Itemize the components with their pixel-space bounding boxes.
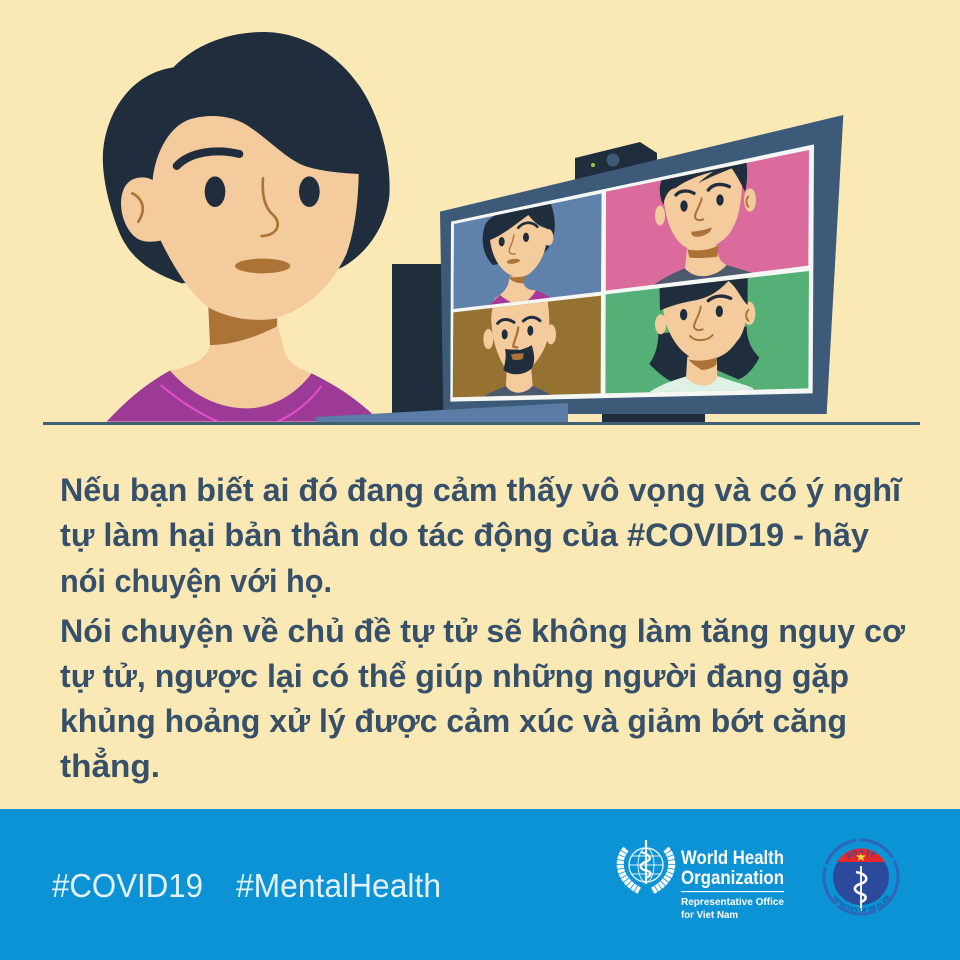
paragraph 2: [60, 613, 905, 784]
logo text: World Health Organization: World Health: [681, 848, 784, 869]
video tile: woman on green: [603, 267, 813, 397]
logo: Ministry of Health: [822, 838, 900, 916]
keyboard: [316, 403, 568, 422]
paragraph 1: Nếu bạn biết ai đó đang cảm thấy vô vọng và có ý nghĩ: [60, 472, 903, 508]
monitor stand: [602, 412, 705, 422]
eyebrow: [177, 151, 239, 166]
woman portrait: [103, 32, 390, 422]
mouth: [235, 259, 290, 273]
monitor: [440, 115, 843, 414]
desk line: [43, 422, 920, 425]
logo: Ministry of Health: MINISTRY OF HEALTH: [832, 895, 890, 912]
logo: Ministry of Health: BỘ Y TẾ: [846, 850, 876, 858]
paragraph 2: Nói chuyện về chủ đề tự tử sẽ không làm tăng nguy cơ: [60, 613, 905, 649]
screen frame: [450, 144, 814, 402]
video tile: bearded man on brown: [450, 293, 603, 400]
logo text: World Health Organization: for Viet Nam: [681, 909, 738, 921]
illustration: woman on video call: [43, 32, 920, 425]
logo text: World Health Organization: [681, 848, 784, 921]
hashtag: COVID19: #COVID19: [52, 867, 203, 904]
logo: World Health Organization emblem: [620, 840, 672, 891]
paragraph 1: [60, 472, 903, 599]
message text: [60, 472, 905, 784]
paragraph 2: khủng hoảng xử lý được cảm xúc và giảm bớt căng: [60, 703, 847, 739]
logo text: World Health Organization: Organization: [681, 868, 784, 889]
video tile: man on pink: [603, 147, 813, 293]
eyes: [205, 176, 320, 207]
webcam: [575, 142, 657, 182]
paragraph 2: tự tử, ngược lại có thể giúp những người đang gặp: [60, 658, 849, 694]
hashtag: MentalHealth: #MentalHealth: [236, 867, 441, 904]
footer band: [0, 809, 960, 960]
paragraph 1: tự làm hại bản thân do tác động của #COVID19 - hãy: [60, 517, 869, 553]
logo text: World Health Organization: Representative Office: [681, 896, 784, 908]
paragraph 2: thẳng.: [60, 748, 160, 784]
computer tower: [392, 264, 446, 413]
paragraph 1: nói chuyện với họ.: [60, 563, 332, 599]
nose and ear line: [132, 178, 278, 236]
video tile: woman on blue: [453, 194, 602, 309]
